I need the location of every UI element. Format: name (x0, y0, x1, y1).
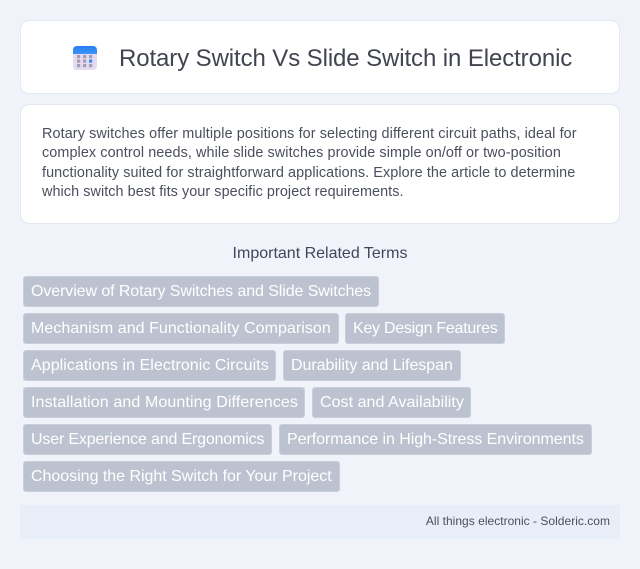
tag: Durability and Lifespan (291, 357, 453, 374)
panel: summary card (20, 104, 620, 224)
tag: Cost and Availability (320, 394, 464, 411)
tag: User Experience and Ergonomics (31, 431, 264, 448)
title: Rotary Switch Vs Slide Switch in Electronic (119, 45, 572, 72)
panel: title card (20, 20, 620, 94)
tag: Applications in Electronic Circuits (31, 357, 269, 374)
tag group: related terms (23, 276, 592, 492)
tag (279, 424, 592, 455)
footer text: All things electronic - Solderic.com (426, 514, 610, 528)
tag: Overview of Rotary Switches and Slide Switches (31, 283, 371, 300)
heading: important related terms: Important Related Terms (233, 245, 407, 262)
tag: Performance in High-Stress Environments (287, 431, 584, 448)
tag: Key Design Features (353, 320, 497, 337)
tag (23, 276, 379, 307)
summary text: Rotary switches offer multiple positions for selecting different circuit paths, ideal for (42, 126, 577, 142)
tag (312, 387, 471, 418)
footer bar (20, 505, 620, 539)
summary text: complex control needs, while slide switches provide simple on/off or two-position (42, 145, 561, 161)
tag (283, 350, 461, 381)
tag (345, 313, 505, 344)
tag (23, 313, 339, 344)
icon: calendar (73, 46, 97, 70)
tag (23, 387, 305, 418)
tag: Mechanism and Functionality Comparison (31, 320, 331, 337)
summary text: functionality suited for straightforward applications. Explore the article to determine (42, 165, 575, 181)
summary text (42, 126, 577, 200)
tag (23, 461, 340, 492)
tag (23, 350, 276, 381)
summary text: which switch best fits your specific project requirements. (42, 184, 404, 200)
tag (23, 424, 272, 455)
tag: Choosing the Right Switch for Your Project (31, 468, 332, 485)
tag: Installation and Mounting Differences (31, 394, 298, 411)
